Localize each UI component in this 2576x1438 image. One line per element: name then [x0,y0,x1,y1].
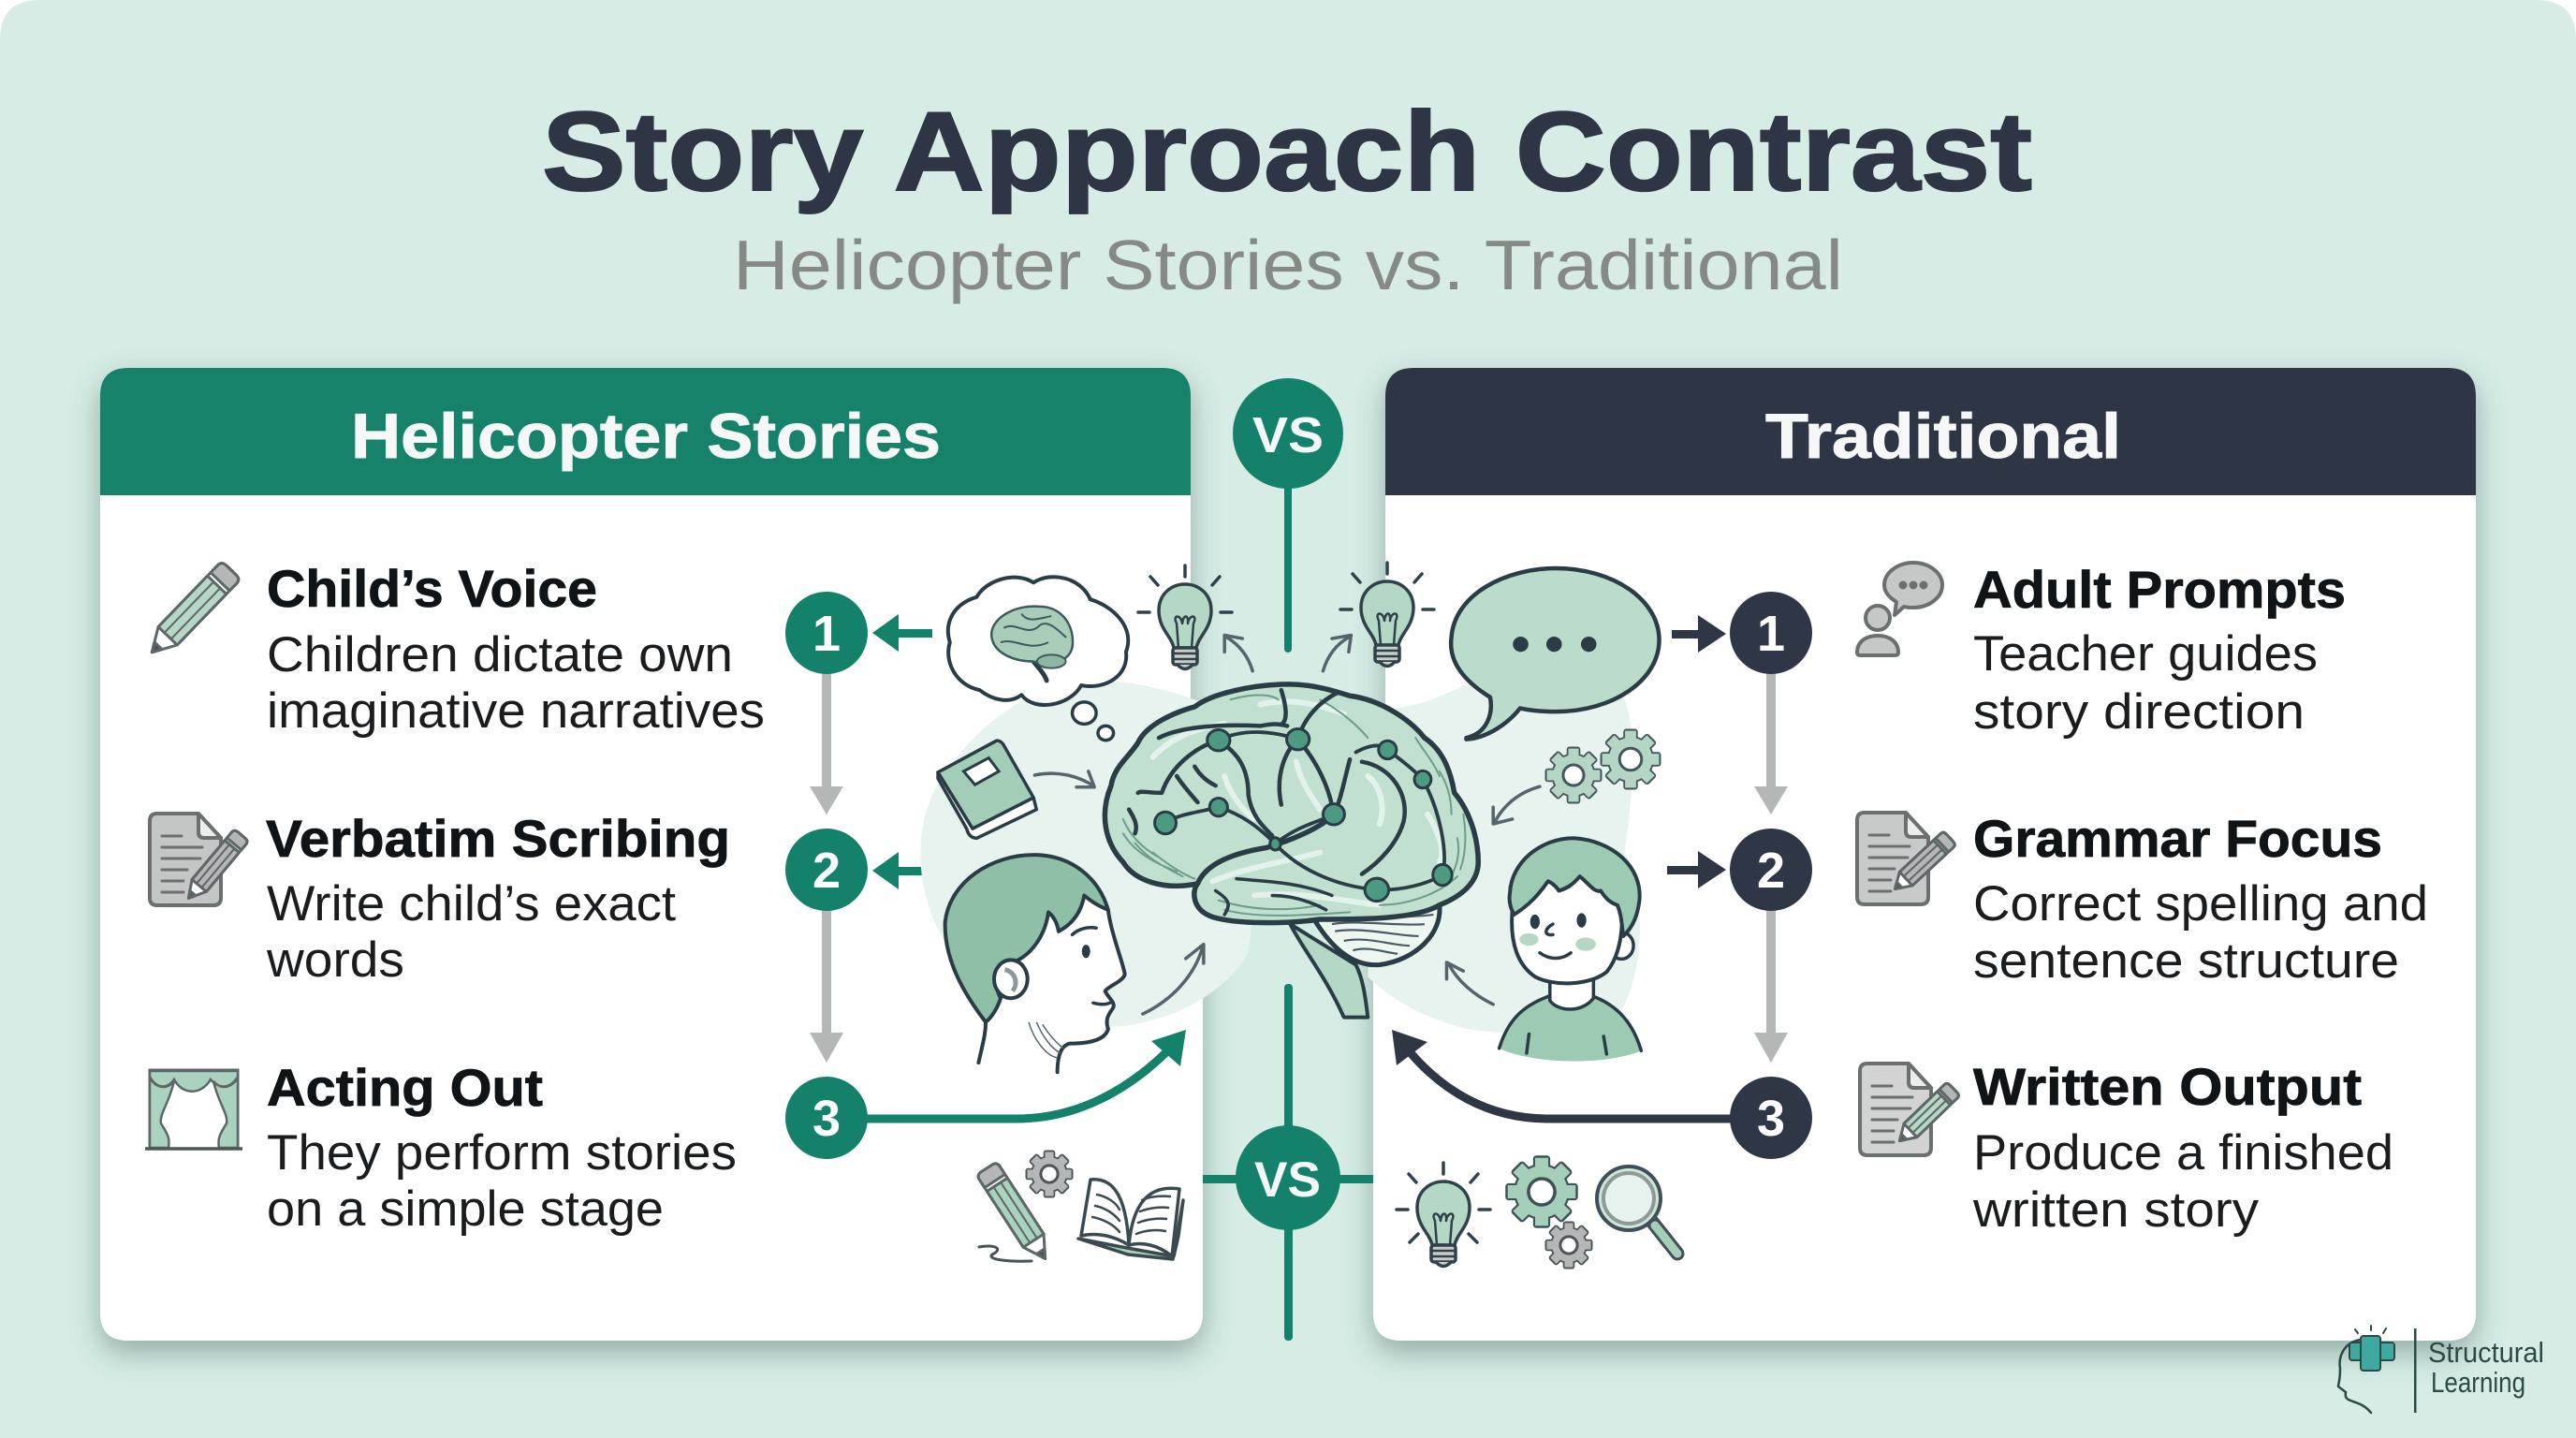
icon: bulb upper right [1340,563,1434,667]
item: grammar focus: Grammar Focus [1973,809,2382,868]
step 2: 2 [812,843,841,899]
icon: book [938,741,1036,838]
step 3 [785,1077,868,1159]
heading: traditional: Traditional [1765,401,2121,472]
icon: document with pencil (grammar) [1857,813,1956,904]
right step flow [1392,592,1812,1159]
left text column [266,559,765,1237]
arrow to step 2 [1667,851,1726,888]
arrow into step 1 [872,614,932,652]
item: written output: written story [1972,1182,2260,1238]
curved arrow from step 3 [1392,1030,1771,1119]
pencil with scribble [976,1162,1056,1266]
step 1 [785,592,868,674]
item: adult prompts: Adult Prompts [1973,560,2346,619]
bottom vs badge with cross lines: VS [1254,1152,1321,1208]
item: verbatim scribing: Verbatim Scribing [266,809,730,868]
item: adult prompts: story direction [1973,684,2305,740]
icon: document with pencil (left) [150,814,249,905]
item: child's voice [267,559,765,739]
title: Story Approach Contrast [542,89,2032,214]
item: acting out [267,1058,737,1237]
central illustration [920,568,1660,1072]
heading: helicopter stories: Helicopter Stories [351,401,941,472]
item: written output [1972,1057,2393,1238]
item: child's voice: Children dictate own [267,627,733,682]
step 2: 2 [1757,843,1785,899]
arrow to step 1 [1672,615,1726,653]
step 1: 1 [1757,606,1785,662]
icon: stage curtains [145,1070,242,1149]
right text column [1972,560,2428,1238]
bottom vs badge with cross lines [1203,984,1373,1341]
left step flow [785,592,1186,1159]
step 3: 3 [812,1091,841,1147]
small gear [1546,1223,1591,1268]
icon: document with green pencil (output) [1860,1064,1960,1155]
step 1: 1 [812,606,841,662]
item: acting out: on a simple stage [267,1181,664,1237]
item: written output: Produce a finished [1973,1125,2393,1181]
item: child's voice: imaginative narratives [267,683,765,739]
item: acting out: Acting Out [267,1058,543,1117]
open book [1078,1180,1183,1259]
logo text: Structural [2428,1336,2544,1369]
icon: gears right of brain [1546,730,1660,802]
icon: adult with speech bubble [1857,563,1942,655]
logo: structural learning: Learning [2431,1366,2525,1399]
step 1 [1730,592,1812,674]
top vs badge with line: VS [1252,407,1324,463]
large gear [1507,1157,1576,1226]
step arrow down 2-3 [810,906,843,1063]
logo: structural learning [2338,1326,2544,1413]
step 3: 3 [1757,1091,1785,1147]
item: child's voice: Child’s Voice [267,559,597,618]
logo mark [2338,1326,2394,1413]
panel: traditional card [1373,368,2476,1341]
item: grammar focus: sentence structure [1973,933,2399,989]
item: acting out: They perform stories [267,1125,737,1181]
icon group: bulb, gears, magnifier [1397,1157,1677,1268]
icon: thought bubble [948,577,1128,741]
illustration: front-facing child [1500,838,1641,1062]
small arrows [1034,635,1540,1014]
item: adult prompts [1973,560,2346,740]
item: grammar focus [1973,809,2428,989]
illustration: central brain [1105,684,1478,1018]
panel: helicopter stories card [100,368,1203,1341]
step 3 [1730,1077,1812,1159]
item: verbatim scribing: Write child’s exact [267,876,676,932]
item: verbatim scribing: words [266,932,404,988]
magnifier [1597,1167,1677,1254]
icon: bulb upper left [1138,565,1232,668]
top vs badge with line [1233,378,1343,653]
pale blob left [920,681,1272,1027]
curved arrow from step 3 [827,1030,1186,1119]
step 2 [785,829,868,911]
subtitle: Helicopter Stories vs. Traditional [733,226,1843,304]
item: verbatim scribing [266,809,730,988]
step arrow down 2-3 [1754,906,1788,1063]
item: grammar focus: Correct spelling and [1973,876,2428,932]
icon: speech bubble [1451,568,1660,740]
item: adult prompts: Teacher guides [1973,626,2318,682]
step 2 [1730,829,1812,911]
icon group: pencil, gear, open book [976,1152,1183,1266]
pale blob right [1368,685,1640,1034]
step arrow down 1-2 [810,669,843,814]
icon: pencil [142,561,241,661]
gear [1027,1152,1072,1196]
step arrow down 1-2 [1754,669,1788,814]
illustration: side profile child [945,855,1125,1072]
arrow into step 2 [872,852,933,889]
item: written output: Written Output [1973,1057,2362,1116]
bulb [1397,1163,1490,1266]
